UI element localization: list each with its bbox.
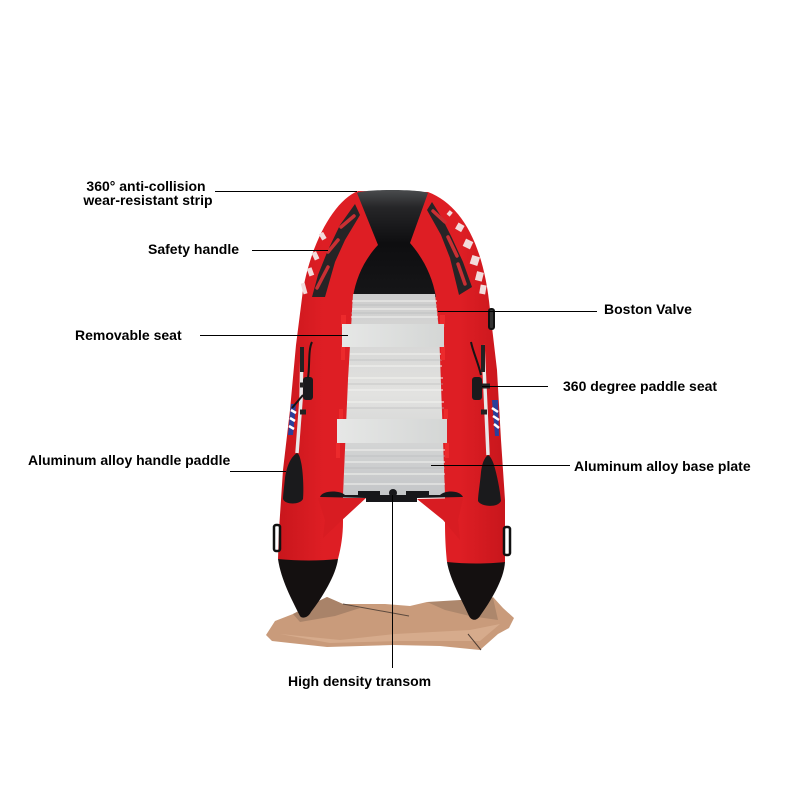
label: removable seat: Removable seat — [75, 327, 182, 343]
leader line: base plate — [431, 464, 570, 466]
floor storage bag under the boat — [266, 597, 514, 650]
label: safety handle: Safety handle — [148, 241, 239, 257]
leader line: boston valve — [438, 310, 597, 312]
removable seat rear — [337, 419, 447, 443]
label: anti-collision strip: 360° anti-collision — [86, 178, 206, 194]
label: handle paddle: Aluminum alloy handle paddle — [28, 452, 230, 468]
bow black patch and interior — [353, 190, 436, 297]
right paddle — [471, 342, 501, 506]
left paddle — [283, 342, 313, 504]
label: paddle seat: 360 degree paddle seat — [563, 378, 717, 394]
left safety handle strip — [312, 204, 360, 297]
right transom gusset — [417, 498, 463, 540]
label: anti-collision strip: wear-resistant strip — [82, 192, 213, 208]
leader line: paddle seat — [482, 386, 548, 388]
leader line: transom — [392, 495, 394, 668]
right side grab handle — [504, 527, 510, 555]
boston valve — [489, 309, 494, 329]
label: base plate: Aluminum alloy base plate — [574, 458, 751, 474]
high density transom — [320, 489, 463, 502]
removable seat front — [342, 324, 444, 347]
leader line: removable seat — [200, 334, 348, 336]
aluminum alloy floor — [343, 294, 445, 495]
leader line: anti-collision strip — [215, 190, 357, 192]
white lettering on tubes — [301, 210, 487, 294]
right pontoon cone — [447, 562, 505, 620]
label: boston valve: Boston Valve — [604, 301, 692, 317]
seat brackets — [336, 315, 449, 458]
blue and white side stripes — [288, 400, 499, 436]
right safety handle strip — [427, 202, 472, 295]
leader line: safety handle — [252, 250, 328, 252]
left transom gusset — [318, 498, 366, 538]
boat — [274, 190, 510, 620]
left pontoon cone — [278, 559, 338, 618]
label: transom: High density transom — [288, 673, 431, 689]
leader line: handle paddle — [230, 470, 286, 472]
left side grab handle — [274, 525, 280, 551]
red tube hull — [278, 191, 505, 564]
